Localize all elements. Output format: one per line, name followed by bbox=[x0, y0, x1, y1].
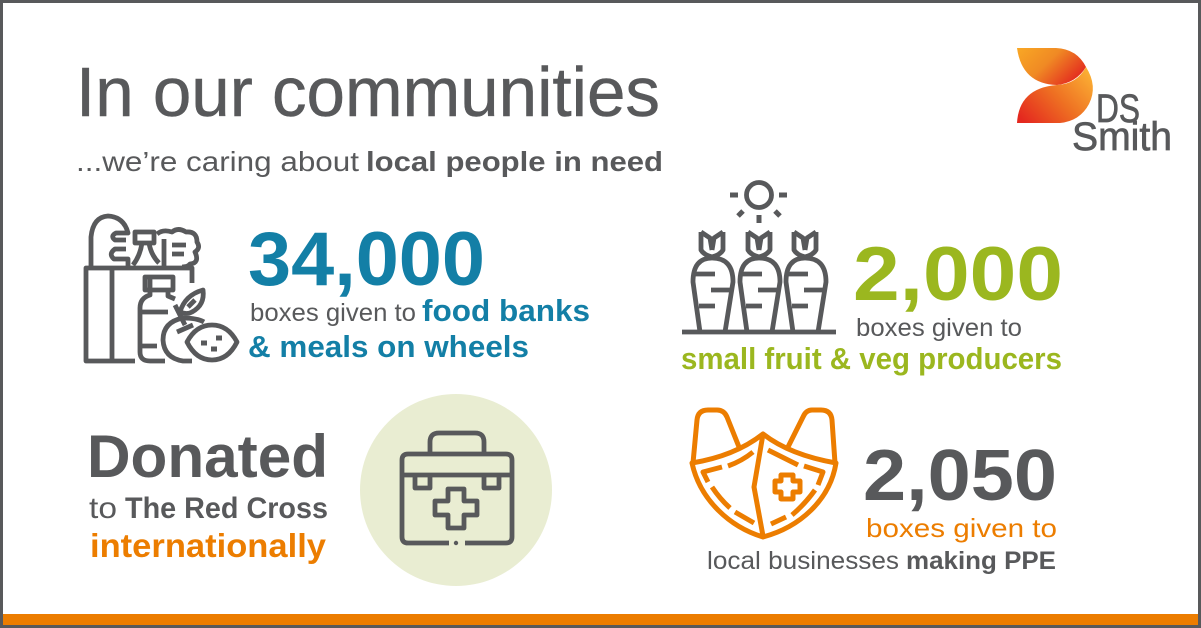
title: In our communities bbox=[76, 53, 660, 131]
stat: 34,000: boxes given to bbox=[250, 299, 416, 327]
donated text: to bbox=[89, 492, 117, 525]
logo: DS Smith: DS bbox=[1096, 87, 1140, 131]
logo: DS Smith bbox=[1017, 48, 1172, 159]
logo: DS Smith: Smith bbox=[1072, 115, 1172, 159]
stat: 34,000: food banks bbox=[422, 293, 590, 328]
stat: 2,050: local businesses bbox=[707, 547, 899, 575]
stat: 2,050: boxes given to bbox=[866, 513, 1057, 543]
stat: 2,000: boxes given to bbox=[856, 314, 1022, 342]
icon: first aid case bbox=[402, 433, 512, 545]
donated text bbox=[87, 423, 328, 564]
orange footer bar bbox=[3, 614, 1198, 625]
stat: 2,000: 2,000 bbox=[853, 232, 1063, 317]
stat: 2,050: making PPE bbox=[906, 547, 1056, 575]
donated text: Donated bbox=[87, 423, 328, 490]
stat: 34,000: 34,000 bbox=[248, 217, 485, 302]
donated text: The Red Cross bbox=[125, 492, 328, 525]
icon: carrots and sun bbox=[682, 182, 836, 332]
icon: groceries bbox=[86, 216, 237, 361]
green circle bbox=[360, 394, 552, 586]
stat: 2,050: 2,050 bbox=[863, 436, 1057, 516]
stat: 2,000: small fruit & veg producers bbox=[681, 341, 1062, 376]
stat: 2,000 bbox=[681, 232, 1063, 376]
subtitle bbox=[76, 146, 663, 177]
stat: 34,000 bbox=[248, 217, 590, 364]
subtitle: local people in need bbox=[366, 146, 663, 177]
subtitle: ...we’re caring about bbox=[76, 146, 359, 177]
stat: 2,050 bbox=[707, 436, 1057, 575]
icon: face mask bbox=[692, 410, 836, 537]
donated text: internationally bbox=[90, 527, 327, 564]
stat: 34,000: & meals on wheels bbox=[248, 329, 529, 364]
